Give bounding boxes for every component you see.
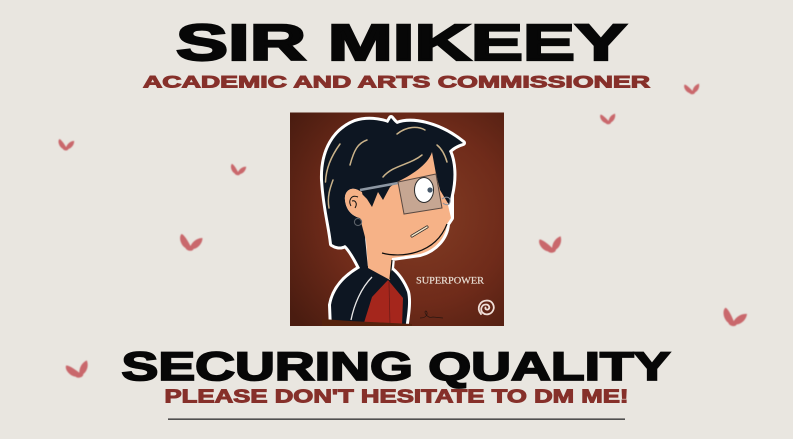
butterfly [600, 111, 617, 126]
butterfly [58, 138, 75, 151]
title: SIR MIKEEY [176, 14, 627, 71]
pupil [427, 187, 433, 193]
neck and face [358, 152, 451, 280]
butterflies [58, 81, 747, 381]
subtitle: ACADEMIC AND ARTS COMMISSIONER [143, 72, 650, 92]
glasses arm [360, 183, 398, 190]
butterfly [65, 357, 92, 381]
butterfly [180, 234, 202, 251]
jacket [331, 266, 408, 330]
butterfly [538, 232, 565, 256]
portrait illustration [290, 112, 504, 330]
portrait background [290, 112, 504, 326]
call to action: PLEASE DON'T HESITATE TO DM ME! [164, 386, 628, 406]
neck shadow line [390, 260, 392, 279]
jacket white stripe [351, 277, 372, 320]
white sticker outline [323, 118, 463, 330]
glasses hinge [442, 197, 450, 205]
mouth [412, 227, 427, 236]
earring [354, 218, 362, 226]
picture bottom shadow [326, 319, 412, 326]
ear inner curl [350, 196, 358, 208]
ear [344, 188, 362, 218]
butterfly [684, 81, 701, 96]
jacket zip [389, 282, 390, 326]
hair highlights [326, 127, 447, 208]
butterfly [722, 308, 747, 327]
jacket red panel [363, 280, 403, 326]
icon: swirl logo [479, 300, 494, 314]
butterfly [231, 164, 246, 175]
eye [414, 178, 434, 202]
heading: securing quality: SECURING QUALITY [122, 345, 671, 389]
chin line [382, 224, 447, 255]
divider line [168, 418, 625, 420]
cartoon character [322, 118, 463, 330]
artist signature [420, 311, 443, 318]
hair [323, 118, 463, 268]
glasses lens [398, 174, 442, 214]
superpower label: SUPERPOWER [416, 276, 484, 287]
